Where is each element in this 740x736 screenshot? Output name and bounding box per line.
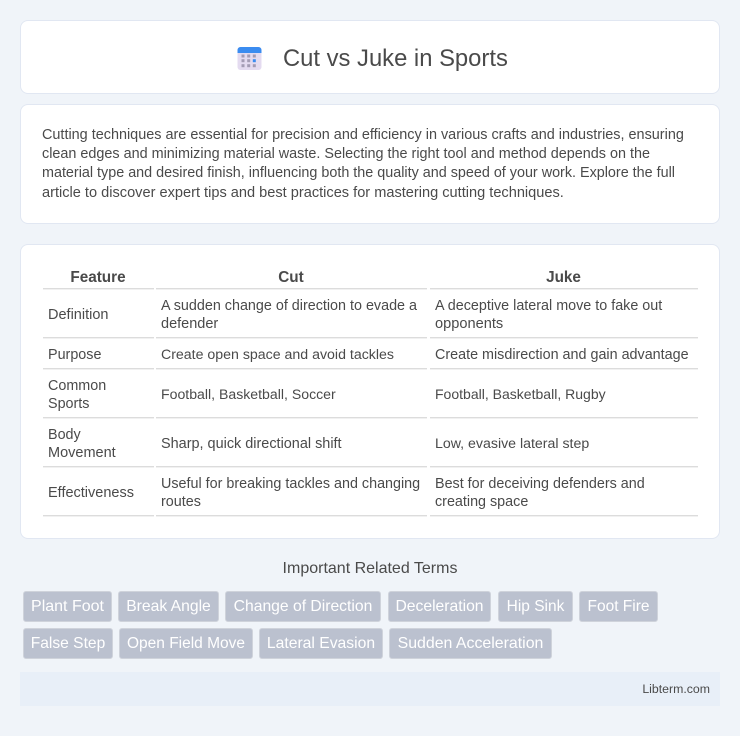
row: purpose: Create open space and avoid tackles	[161, 347, 394, 363]
panel: introduction	[20, 104, 720, 224]
row: body movement: Movement	[48, 445, 116, 461]
row: body movement: Sharp, quick directional shift	[161, 436, 342, 452]
tag list	[23, 591, 658, 659]
row: definition	[48, 298, 662, 332]
row: effectiveness: Useful for breaking tackles and changing	[161, 476, 420, 492]
title: Cut vs Juke in Sports	[283, 45, 508, 72]
tag list: Plant Foot	[31, 598, 104, 615]
row: effectiveness: Effectiveness	[48, 485, 134, 501]
row: common sports: Football, Basketball, Rugby	[435, 386, 606, 402]
panel: comparison table	[20, 244, 720, 539]
footer	[20, 672, 720, 706]
table header: Cut	[278, 269, 304, 286]
row: body movement	[48, 427, 589, 461]
icon: calendar	[238, 47, 262, 70]
row: purpose: Create misdirection and gain advantage	[435, 347, 689, 363]
text: introduction: material type and desired finish, influencing both the quality and speed of your work. Explore the full	[42, 165, 675, 181]
tag list: Hip Sink	[507, 598, 564, 615]
text: introduction	[42, 127, 684, 201]
tag list: Break Angle	[126, 598, 211, 615]
row: definition: A sudden change of direction to evade a	[161, 298, 417, 314]
tag list: False Step	[31, 635, 105, 652]
row: effectiveness: creating space	[435, 494, 528, 510]
row: definition: opponents	[435, 316, 503, 332]
panel: header	[20, 20, 720, 94]
row: body movement: Body	[48, 427, 81, 443]
row: definition: Definition	[48, 307, 108, 323]
table header	[70, 269, 581, 286]
row: purpose	[48, 347, 689, 363]
row: definition: defender	[161, 316, 218, 332]
row: effectiveness: routes	[161, 494, 201, 510]
row: common sports: Sports	[48, 396, 89, 412]
tag list: Open Field Move	[127, 635, 245, 652]
text: introduction: article to discover expert tips and best practices for mastering cutting techniques.	[42, 185, 564, 201]
text: introduction: Cutting techniques are essential for precision and efficiency in various crafts and industries, ensuring	[42, 127, 684, 143]
row: common sports: Common	[48, 378, 106, 394]
tag list: Deceleration	[395, 598, 484, 615]
table header: Juke	[546, 269, 581, 286]
tag list: Change of Direction	[234, 598, 372, 615]
footer link: Libterm.com	[642, 682, 710, 696]
heading: related terms: Important Related Terms	[283, 560, 457, 577]
row: definition: A deceptive lateral move to fake out	[435, 298, 662, 314]
tag list: Foot Fire	[587, 598, 650, 615]
row: common sports: Football, Basketball, Soccer	[161, 386, 336, 402]
row: body movement: Low, evasive lateral step	[435, 436, 589, 452]
tag list: Lateral Evasion	[267, 635, 375, 652]
row: effectiveness	[48, 476, 645, 510]
text: introduction: clean edges and minimizing material waste. Selecting the right tool and method depends on the	[42, 146, 650, 162]
tag list: Sudden Acceleration	[398, 635, 543, 652]
row: common sports	[48, 378, 606, 412]
row: effectiveness: Best for deceiving defenders and	[435, 476, 645, 492]
row: purpose: Purpose	[48, 347, 101, 363]
table header: Feature	[70, 269, 126, 286]
